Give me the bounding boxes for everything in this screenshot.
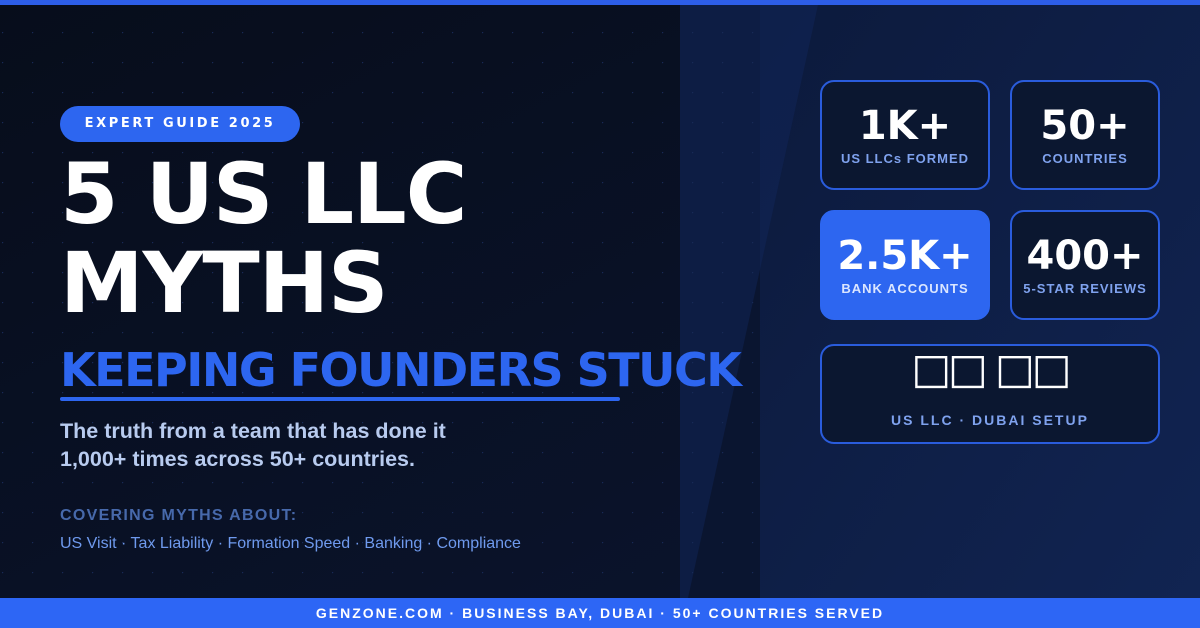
stat card: countries: 50+ — [1040, 103, 1130, 149]
stat card: countries: COUNTRIES — [1042, 151, 1128, 166]
stat card: reviews: 5-STAR REVIEWS — [1023, 281, 1147, 296]
stat card: LLCs: 1K+ — [859, 103, 951, 149]
badge: expert guide — [60, 106, 300, 142]
tagline text: The truth from a team that has done it — [60, 419, 446, 443]
stat card: reviews — [1010, 210, 1160, 320]
title — [60, 145, 466, 332]
badge: expert guide: EXPERT GUIDE 2025 — [85, 116, 275, 131]
stat card: bank accounts: BANK ACCOUNTS — [841, 281, 969, 296]
tagline text: 1,000+ times across 50+ countries. — [60, 447, 415, 471]
stat card: countries — [1010, 80, 1160, 190]
footer bar: GENZONE.COM · BUSINESS BAY, DUBAI · 50+ COUNTRIES SERVED — [316, 605, 884, 621]
topics list: US Visit · Tax Liability · Formation Speed · Banking · Compliance — [60, 535, 521, 552]
tagline text — [60, 419, 446, 471]
stat card: LLCs — [820, 80, 990, 190]
card: flags US LLC Dubai setup: □□ □□ — [911, 344, 1069, 393]
covering label: COVERING MYTHS ABOUT: — [60, 507, 297, 524]
card: flags US LLC Dubai setup — [820, 344, 1160, 444]
title: 5 US LLC — [60, 145, 466, 243]
subtitle heading: KEEPING FOUNDERS STUCK — [60, 343, 740, 397]
footer bar — [0, 598, 1200, 628]
stat card: bank accounts — [820, 210, 990, 320]
stat card: bank accounts: 2.5K+ — [837, 233, 973, 279]
card: flags US LLC Dubai setup: US LLC · DUBAI SETUP — [891, 412, 1089, 428]
title: MYTHS — [60, 234, 388, 332]
underline — [60, 397, 620, 401]
stat card: reviews: 400+ — [1026, 233, 1144, 279]
stat card: LLCs: US LLCs FORMED — [841, 151, 969, 166]
